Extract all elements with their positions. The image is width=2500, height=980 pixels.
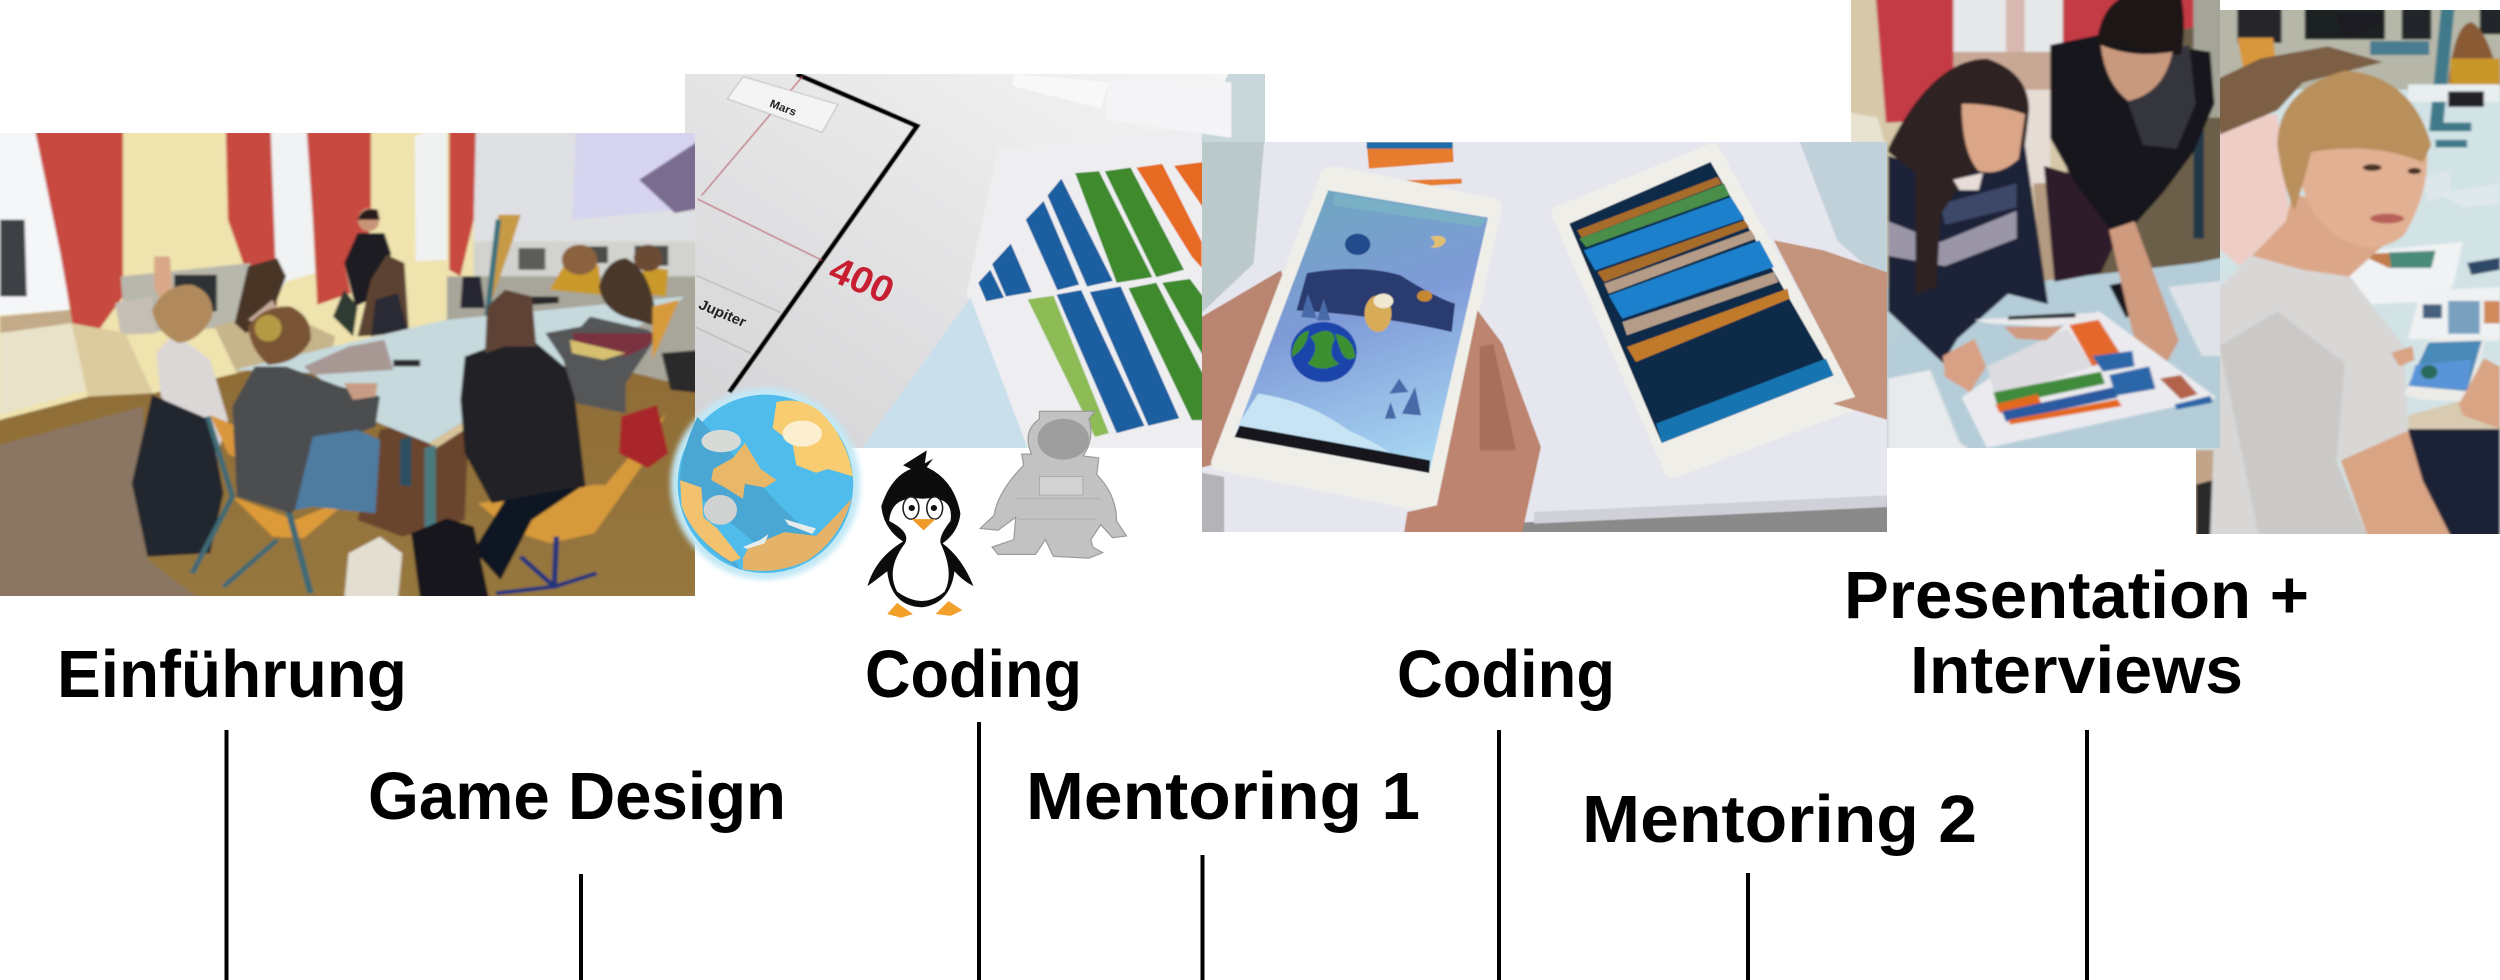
timeline tick: Coding first [977, 722, 981, 980]
sheet label: Mars: Mars [768, 98, 798, 119]
icon: planet globe [671, 388, 860, 580]
sheet value: 400: 400 [822, 249, 901, 312]
step label: Mentoring 2: Mentoring 2 [1582, 782, 1977, 857]
photo: student presenting to camera [2196, 10, 2500, 534]
icon: penguin [867, 450, 973, 618]
timeline tick: Mentoring 2 [1746, 873, 1750, 980]
timeline tick: Presentation [2085, 730, 2089, 980]
step label: Presentation + Interviews [1844, 558, 2309, 708]
step label: Game Design: Game Design [368, 759, 786, 834]
step label: Mentoring 1: Mentoring 1 [1026, 759, 1420, 834]
timeline tick: Game Design [579, 874, 583, 980]
timeline tick: Mentoring 1 [1200, 855, 1204, 980]
photo: classroom introduction [0, 133, 695, 596]
icon: sketched astronaut [980, 411, 1126, 558]
step label: Presentation + Interviews: Interviews [1910, 633, 2243, 708]
photo: paper game design sheets [685, 74, 1265, 448]
step label: Einführung: Einführung [57, 637, 407, 712]
sheet label: Jupiter: Jupiter [696, 297, 749, 331]
step label: Coding second: Coding [1397, 637, 1615, 712]
game assets: globe, penguin, astronaut [666, 386, 1128, 618]
photo: two tablets with game and code [1202, 142, 1887, 532]
timeline tick: Einführung [224, 730, 228, 980]
timeline tick: Coding second [1497, 730, 1501, 980]
step label: Presentation + Interviews: Presentation + [1844, 558, 2309, 633]
photo: student and mentor at worksheet [1851, 0, 2220, 448]
step label: Coding first: Coding [865, 637, 1082, 712]
